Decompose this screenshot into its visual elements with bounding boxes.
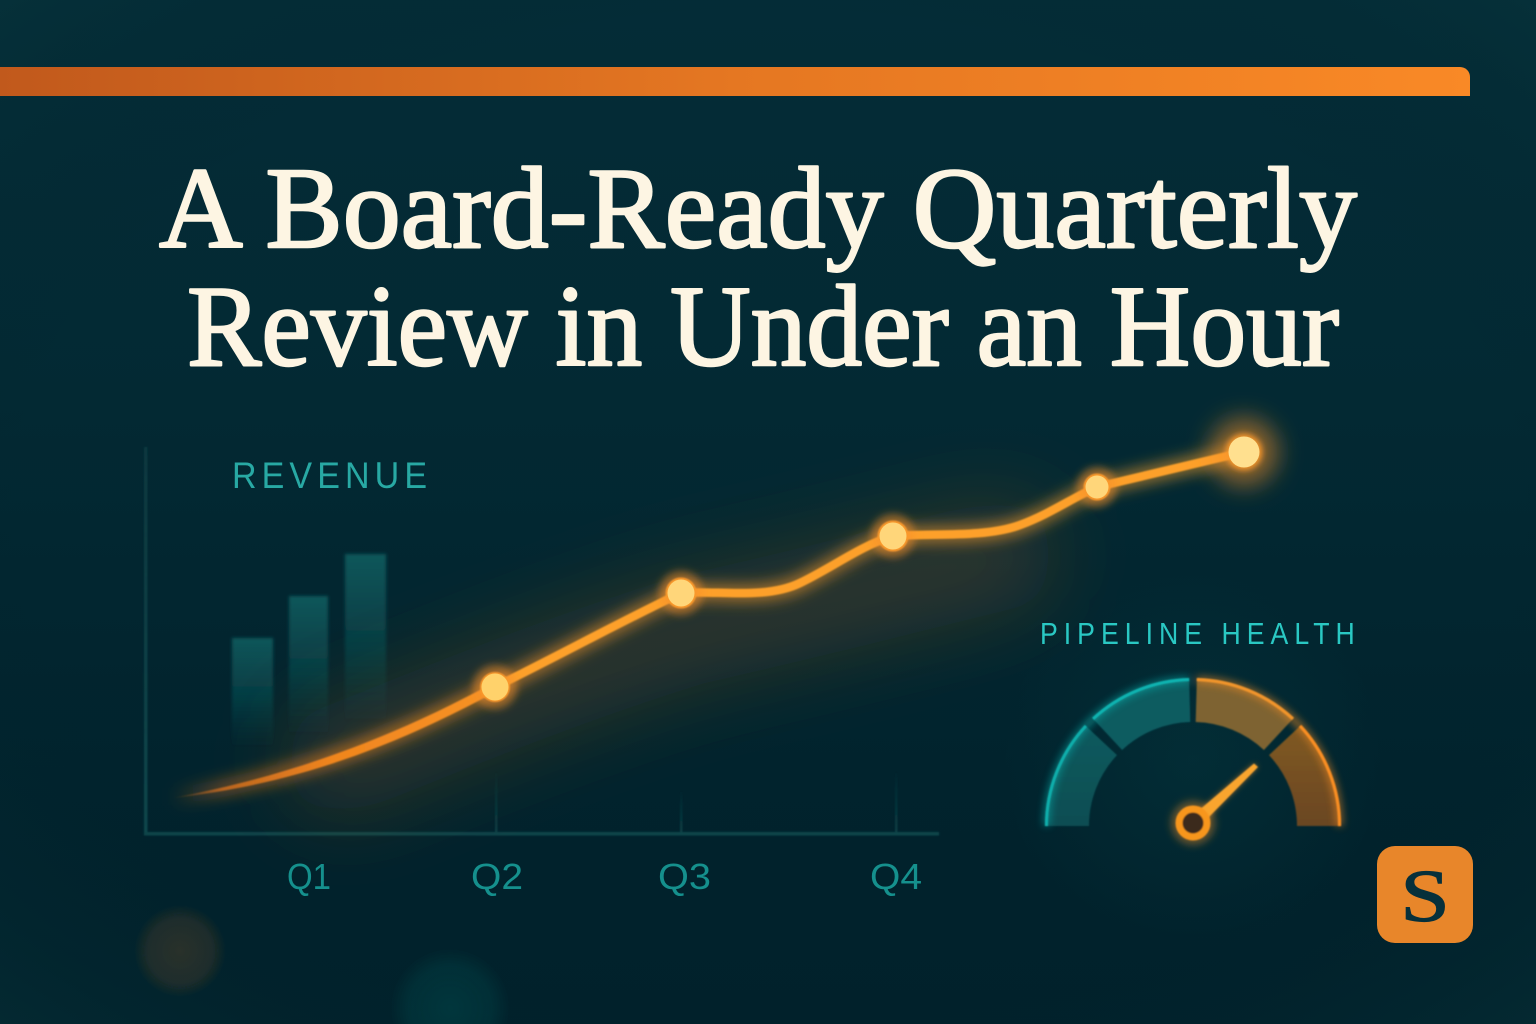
chart axes bbox=[144, 447, 939, 836]
warm glow under line bbox=[340, 555, 1000, 760]
gauge edge glow bbox=[1046, 680, 1340, 826]
gauge label: PIPELINE HEALTH bbox=[1040, 617, 1355, 652]
logo badge: S bbox=[1400, 855, 1450, 937]
pipeline health gauge bbox=[1003, 570, 1383, 950]
data points bbox=[473, 418, 1278, 709]
top orange bar bbox=[0, 67, 1470, 96]
title: A Board-Ready Quarterly bbox=[159, 145, 1357, 273]
title bbox=[159, 145, 1357, 391]
quarter labels: Q4 bbox=[870, 856, 922, 897]
quarter labels: Q3 bbox=[658, 856, 711, 897]
revenue label: REVENUE bbox=[232, 455, 427, 496]
mini bar chart bbox=[232, 554, 386, 748]
gauge bright outer edges bbox=[1046, 680, 1340, 826]
decorative bokeh circles bbox=[134, 905, 510, 1024]
revenue growth line bbox=[172, 452, 1244, 798]
title: Review in Under an Hour bbox=[187, 263, 1339, 391]
quarter labels bbox=[287, 856, 922, 897]
logo badge bbox=[1377, 846, 1473, 943]
gauge needle bbox=[1171, 764, 1258, 845]
revenue chart bbox=[144, 418, 1278, 897]
quarter labels: Q2 bbox=[471, 856, 523, 897]
gauge segments bbox=[1045, 678, 1341, 826]
quarter labels: Q1 bbox=[287, 856, 331, 897]
